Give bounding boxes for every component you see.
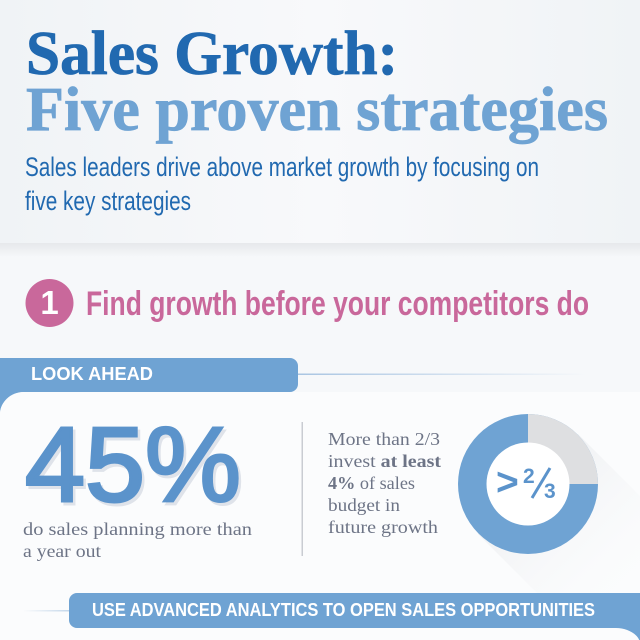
stat: 45 percent: 45% xyxy=(25,406,241,524)
analytics line xyxy=(24,610,70,612)
analytics banner: USE ADVANCED ANALYTICS TO OPEN SALES OPPORTUNITIES xyxy=(92,600,595,620)
number badge: 1 xyxy=(40,284,59,321)
stat caption: a year out xyxy=(23,541,101,561)
donut label: > xyxy=(496,461,519,504)
donut shadow xyxy=(478,434,640,593)
donut label: 3 xyxy=(544,480,556,503)
look ahead banner xyxy=(0,358,298,414)
number badge xyxy=(26,279,74,327)
white content card xyxy=(0,392,640,640)
donut chart xyxy=(458,414,598,554)
investment text: 4% of sales xyxy=(328,473,415,493)
subtitle xyxy=(25,152,539,216)
investment text: future growth xyxy=(328,517,438,537)
title line 2: Five proven strategies xyxy=(26,76,608,144)
stat: 45 percent: 45% xyxy=(28,409,244,527)
header panel xyxy=(0,0,640,257)
stat caption: do sales planning more than xyxy=(23,519,252,539)
investment text: budget in xyxy=(328,495,400,515)
investment text: More than 2/3 xyxy=(328,429,440,449)
donut label xyxy=(496,461,556,504)
investment text xyxy=(328,429,441,537)
analytics banner xyxy=(69,593,640,640)
investment text: invest at least xyxy=(328,451,441,471)
panel: look ahead xyxy=(0,358,640,640)
look ahead line xyxy=(297,374,587,375)
divider xyxy=(302,422,303,556)
stat caption xyxy=(23,519,252,561)
subtitle: five key strategies xyxy=(25,186,191,216)
look ahead banner: LOOK AHEAD xyxy=(31,364,153,384)
title line 1: Sales Growth: xyxy=(26,20,398,88)
donut label: 2 xyxy=(523,465,535,488)
section heading xyxy=(26,279,589,327)
